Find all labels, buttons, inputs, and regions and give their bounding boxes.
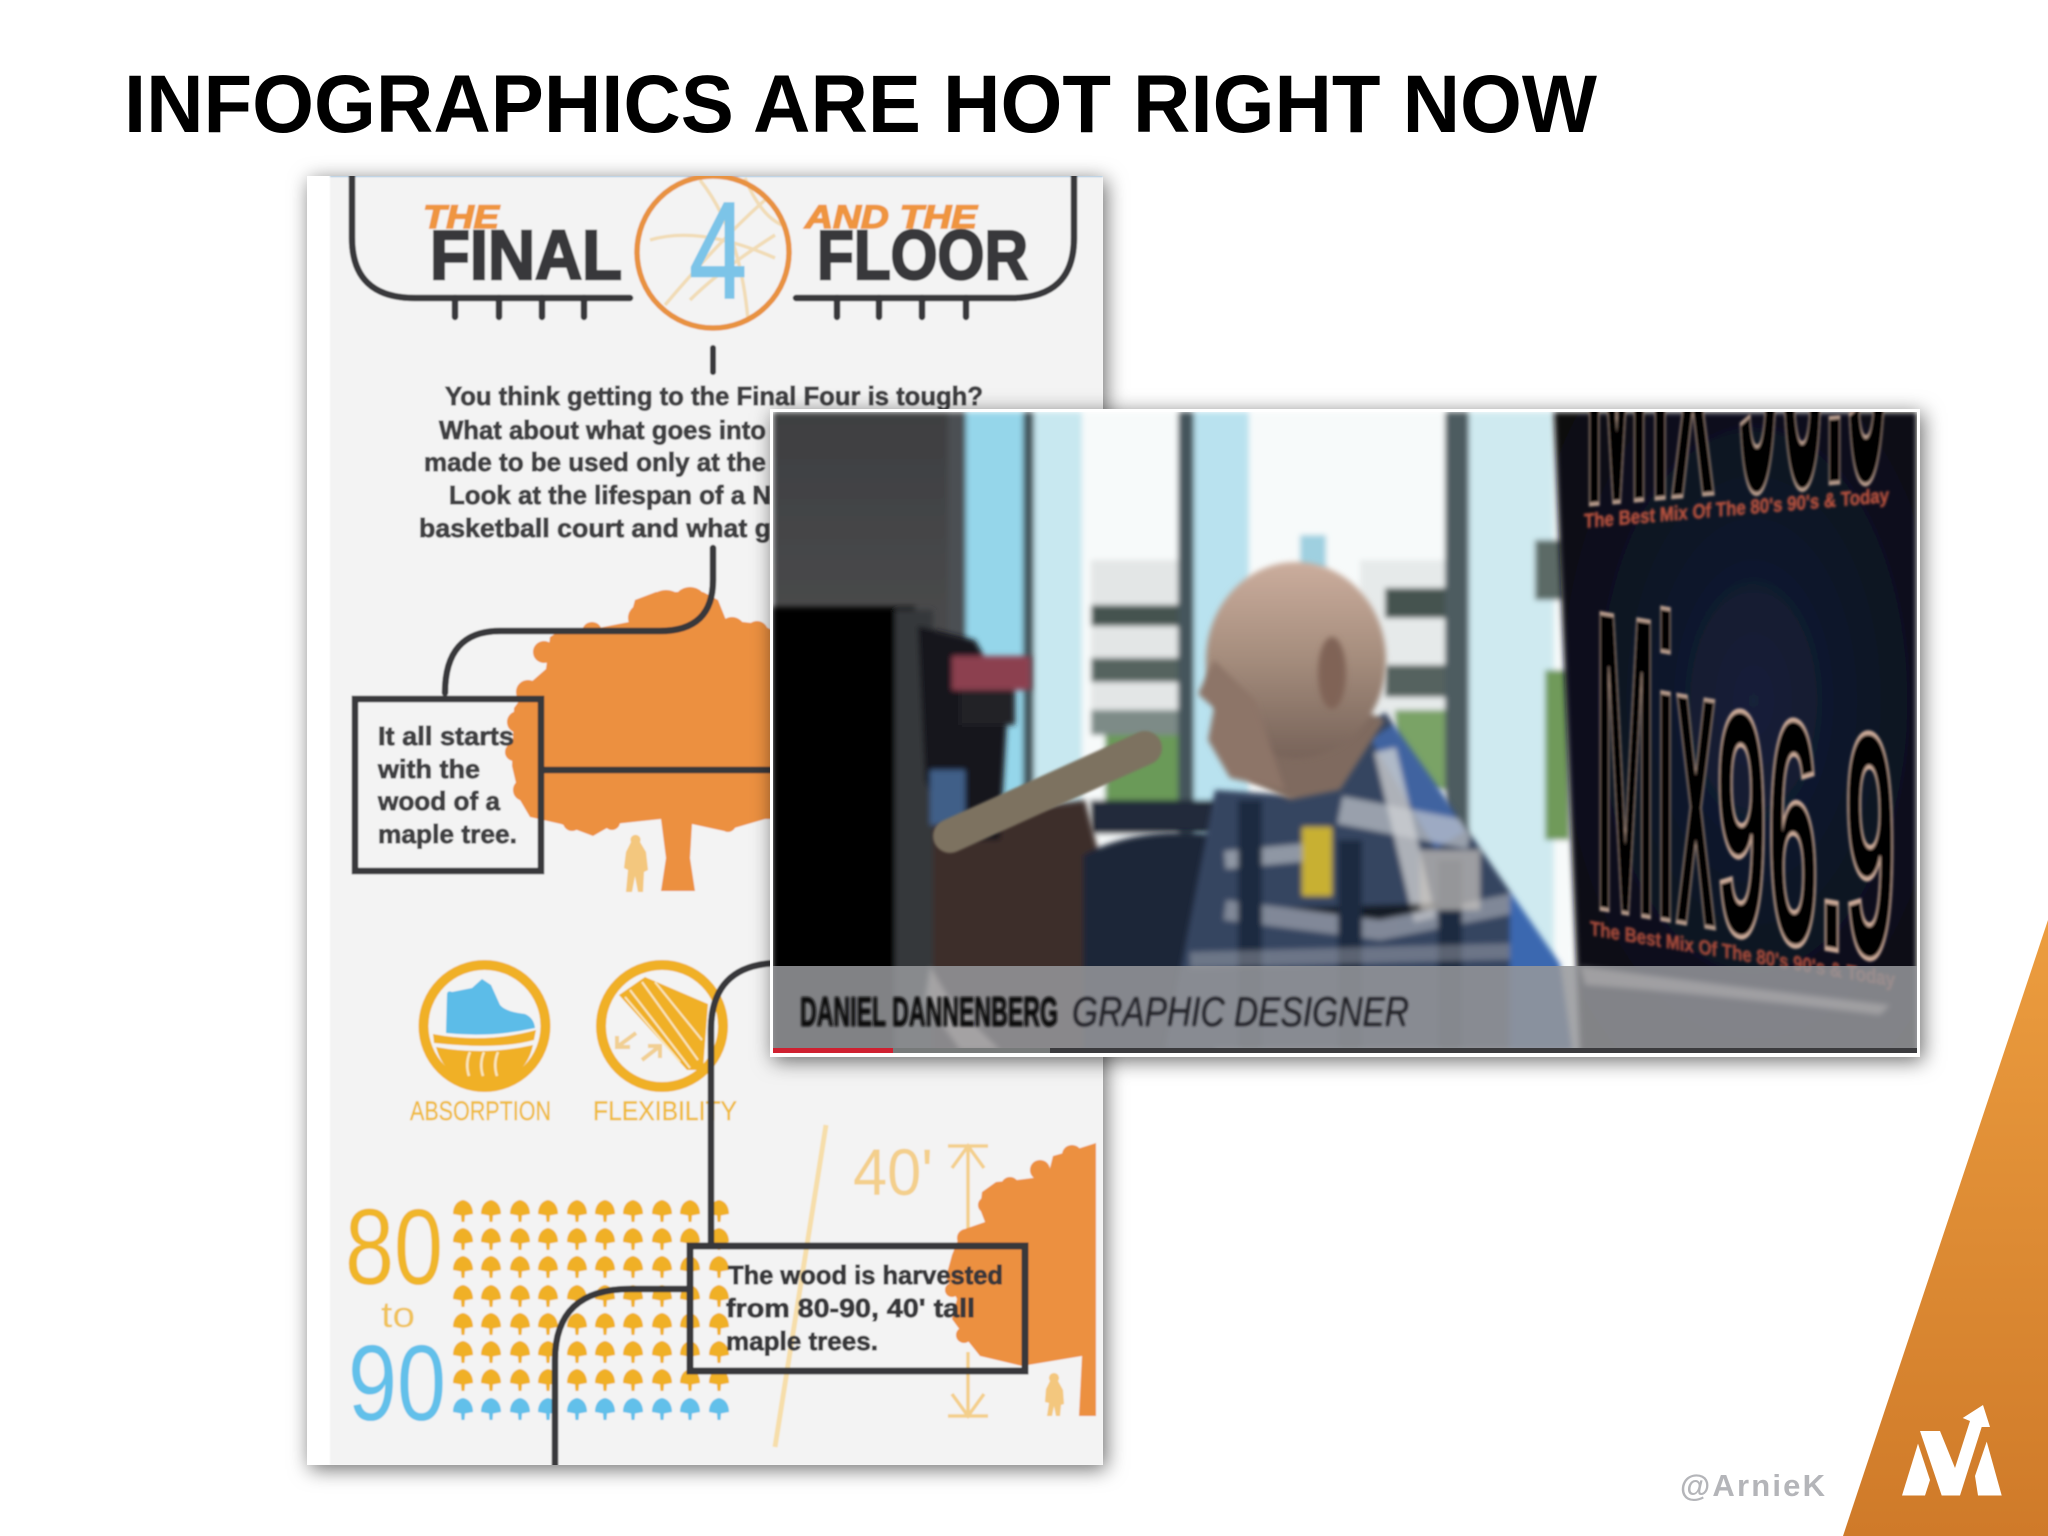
panel: video still — [770, 80, 1920, 1060]
intro paragraph: basketball court and what g — [419, 513, 771, 543]
icon: orange maple tree — [505, 587, 780, 891]
heading left: THE — [423, 199, 501, 235]
hoop backboard lines — [352, 170, 1074, 317]
callout: maple tree: maple tree. — [378, 819, 517, 849]
intro paragraph: You think getting to the Final Four is tough? — [445, 381, 983, 411]
callout: harvesting — [690, 1246, 1025, 1371]
label: 40 foot height: 40' — [853, 1135, 933, 1209]
corner triangle — [1843, 920, 2048, 1536]
connectors to second callout — [555, 963, 775, 1470]
icon: second maple tree — [945, 1143, 1096, 1416]
numeral 4: 4 — [689, 174, 747, 328]
number 90: 90 — [348, 1322, 446, 1443]
radio banner — [1554, 80, 1917, 1053]
connector to first callout — [445, 548, 713, 693]
heading right — [802, 204, 1030, 282]
label: flexibility: FLEXIBILITY — [593, 1096, 737, 1126]
icon: person silhouette — [624, 835, 648, 892]
man in plaid shirt — [1160, 562, 1580, 1060]
number 80: 80 — [345, 1186, 443, 1307]
callout: maple tree: with the — [377, 754, 480, 784]
callout: maple tree: wood of a — [377, 786, 501, 816]
microphone — [950, 748, 1145, 836]
radio banner: The Best Mix Of The 80's 90's & Today — [1584, 484, 1889, 532]
radio banner: The Best Mix Of The 80's 90's & Today — [1590, 918, 1895, 992]
icon: absorption shoe in bowl — [424, 965, 546, 1087]
radio banner: Mix 96.9 — [1584, 80, 1889, 599]
icon: flexibility wood plank — [601, 965, 723, 1087]
label: absorption: ABSORPTION — [410, 1096, 551, 1126]
callout: harvesting: from 80-90, 40' tall — [726, 1293, 975, 1323]
lower third highlights — [925, 966, 1890, 1050]
lower third bar — [773, 966, 1917, 1050]
heading right: FLOOR — [817, 216, 1028, 294]
lower third caption: DANIEL DANNENBERG — [800, 988, 1058, 1035]
intro paragraph: What about what goes into — [439, 415, 766, 445]
lower third caption: GRAPHIC DESIGNER — [1072, 988, 1409, 1035]
connector stem — [710, 348, 716, 372]
radio banner: 96.9 — [1716, 642, 1896, 1029]
callout: maple tree — [355, 699, 775, 871]
heading right: AND THE — [804, 199, 979, 235]
icon: second person silhouette — [1045, 1373, 1064, 1416]
divider slash — [775, 1125, 826, 1447]
callout: maple tree: It all starts — [378, 721, 514, 751]
word to: to — [381, 1294, 415, 1335]
arrow: height dimension — [948, 1146, 988, 1416]
studio window and scene — [773, 412, 1573, 1053]
callout: harvesting: maple trees. — [726, 1326, 878, 1356]
icon: arrow M logo — [1902, 1405, 2002, 1496]
heading left: FINAL — [430, 216, 622, 294]
intro paragraph — [419, 381, 983, 543]
heading left — [424, 204, 622, 282]
intro paragraph: Look at the lifespan of a N — [449, 480, 771, 510]
panel: infographic screenshot — [307, 170, 1103, 1470]
intro paragraph: made to be used only at the — [424, 447, 766, 477]
title: INFOGRAPHICS ARE HOT RIGHT NOW — [124, 59, 1598, 150]
studio equipment — [773, 607, 1215, 1053]
callout: harvesting: The wood is harvested — [728, 1260, 1003, 1290]
radio banner: Mix — [1595, 520, 1716, 1021]
handle: @ArnieK — [1680, 1468, 1826, 1503]
tree count pictogram grid — [453, 1200, 729, 1420]
video progress bar — [773, 1048, 1917, 1054]
icon: basketball hoop circle — [637, 176, 789, 328]
